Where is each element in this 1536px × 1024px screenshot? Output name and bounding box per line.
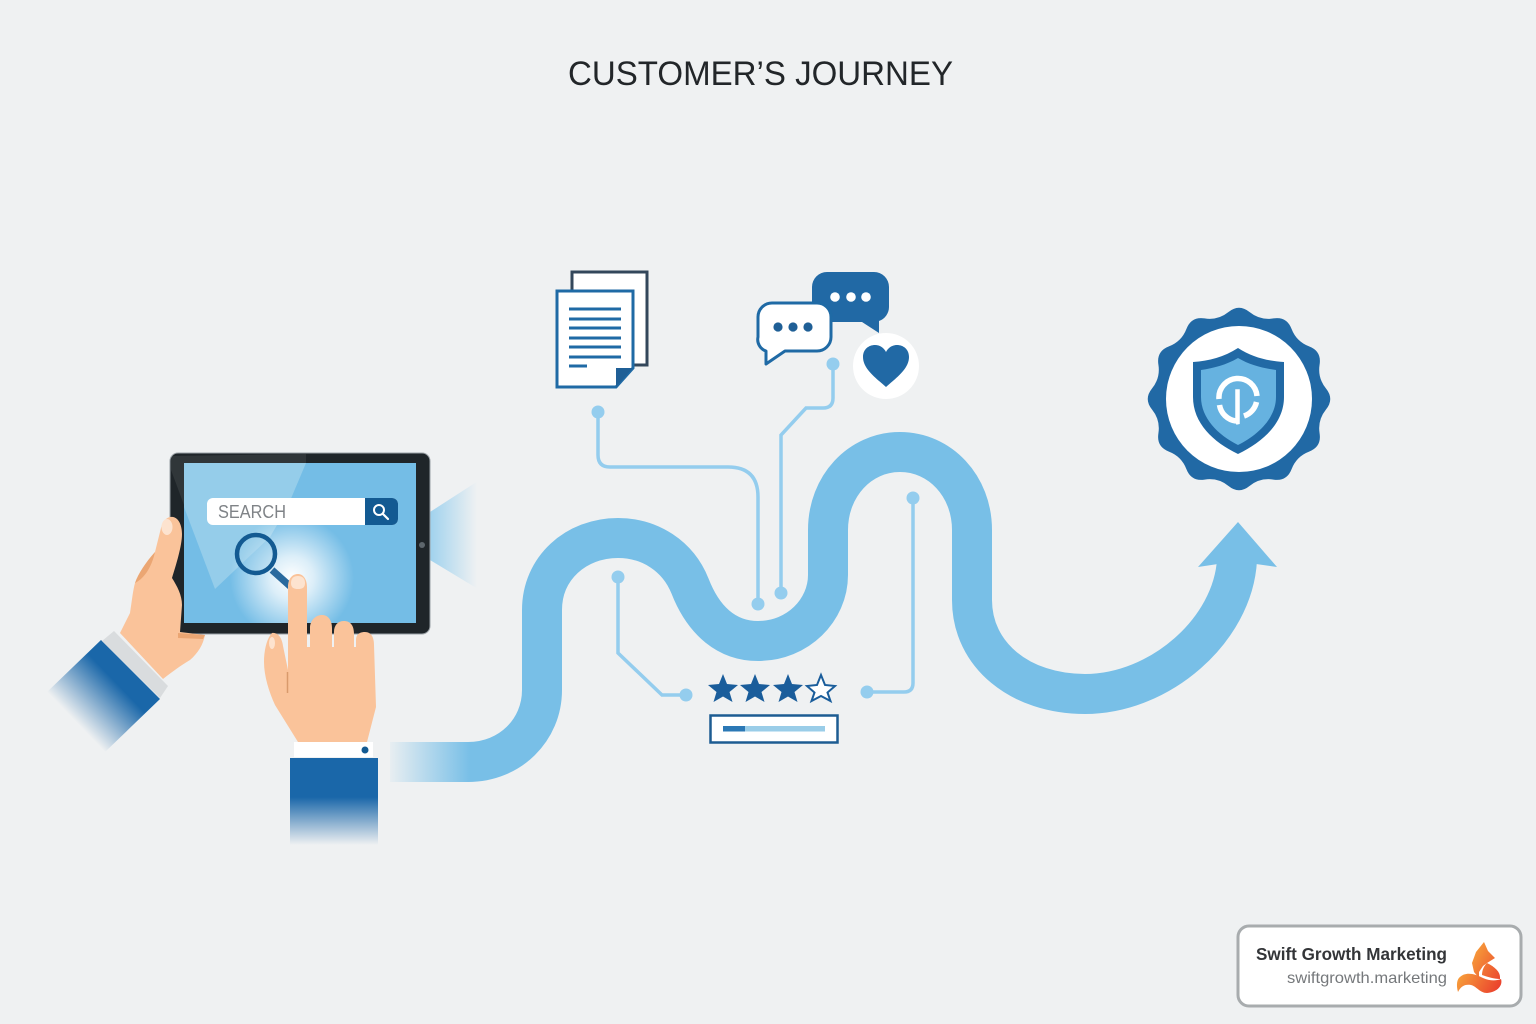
back sheet [572, 272, 647, 365]
dark chat bubble [812, 272, 889, 333]
brand name: Swift Growth Marketing [1256, 944, 1447, 964]
connector: chat [781, 364, 833, 593]
trust badge [1148, 308, 1330, 490]
icon: fox logo [1457, 942, 1501, 993]
heart badge [853, 333, 919, 399]
card box [1238, 926, 1521, 1006]
journey ribbon arrow [390, 452, 1277, 762]
connector: rating right [867, 498, 913, 692]
left cuff [102, 631, 168, 698]
right cuff [294, 742, 373, 757]
shield symbol [1219, 378, 1257, 424]
left hand shape [120, 517, 205, 679]
magnifying glass [237, 535, 291, 587]
tablet body [170, 453, 430, 634]
badge scalloped ring [1148, 308, 1330, 490]
light wedge behind tablet [430, 481, 478, 589]
icon: chat bubbles and heart [758, 272, 919, 399]
left hand holding tablet [46, 517, 205, 752]
connector: documents [598, 412, 758, 604]
left sleeve [46, 640, 160, 752]
left hand shading [135, 552, 155, 583]
review progress box [710, 716, 838, 742]
shield [1193, 348, 1284, 454]
icon: documents [557, 272, 647, 387]
right hand pointing [264, 574, 378, 845]
right hand shape [264, 574, 376, 742]
index fingernail [291, 576, 305, 589]
right sleeve [290, 758, 378, 845]
connector: rating left [618, 577, 686, 695]
front sheet [557, 291, 633, 387]
tablet [170, 453, 430, 640]
badge white disc [1166, 326, 1312, 472]
thumb crease [286, 672, 288, 693]
title: CUSTOMER’S JOURNEY [568, 55, 953, 93]
search bar: SEARCH [218, 502, 286, 522]
connector lines [598, 364, 913, 695]
white chat bubble [758, 303, 831, 364]
connector dots [592, 358, 920, 702]
star rating [708, 674, 835, 702]
tablet bezel glare [171, 454, 306, 505]
brand card [1238, 926, 1521, 1006]
tablet camera [419, 542, 425, 548]
brand url: swiftgrowth.marketing [1287, 970, 1447, 987]
tablet screen [184, 463, 416, 640]
left thumbnail [162, 519, 172, 535]
thumb nail [269, 637, 275, 649]
cuff button [362, 746, 368, 754]
search bar [207, 498, 398, 525]
text lines [569, 309, 621, 366]
